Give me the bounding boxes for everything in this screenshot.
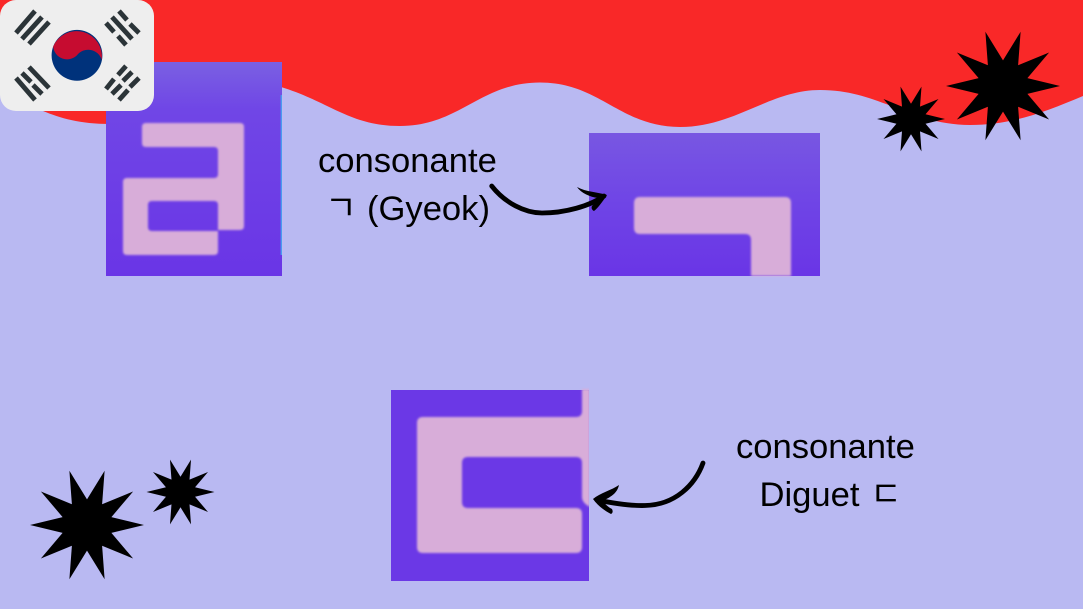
icon: small star top bbox=[877, 87, 945, 151]
text: consonante diguet: ㄷ bbox=[870, 476, 902, 514]
panel: letter image d bbox=[391, 385, 593, 581]
text: consonante diguet: Diguet bbox=[760, 476, 860, 514]
text: consonante gyeok: ㄱ bbox=[325, 190, 357, 228]
text: consonante gyeok: consonante bbox=[318, 142, 497, 180]
red wave banner bbox=[0, 0, 1083, 127]
text: consonante gyeok: (Gyeok) bbox=[367, 190, 490, 228]
icon: large star bottom bbox=[30, 471, 144, 579]
arrow: to gyeok bbox=[492, 186, 607, 213]
panel: letter image g bbox=[106, 62, 282, 276]
icon: small star bottom bbox=[146, 460, 214, 524]
icon: taegeuk bbox=[52, 30, 102, 81]
icon: large star top bbox=[946, 32, 1060, 140]
flag: South Korea bbox=[0, 0, 154, 111]
panel: letter image g crop bbox=[589, 133, 820, 276]
arrow: to diguet bbox=[593, 463, 703, 514]
icon: trigrams bbox=[16, 11, 139, 100]
text: consonante diguet: consonante bbox=[736, 428, 915, 466]
